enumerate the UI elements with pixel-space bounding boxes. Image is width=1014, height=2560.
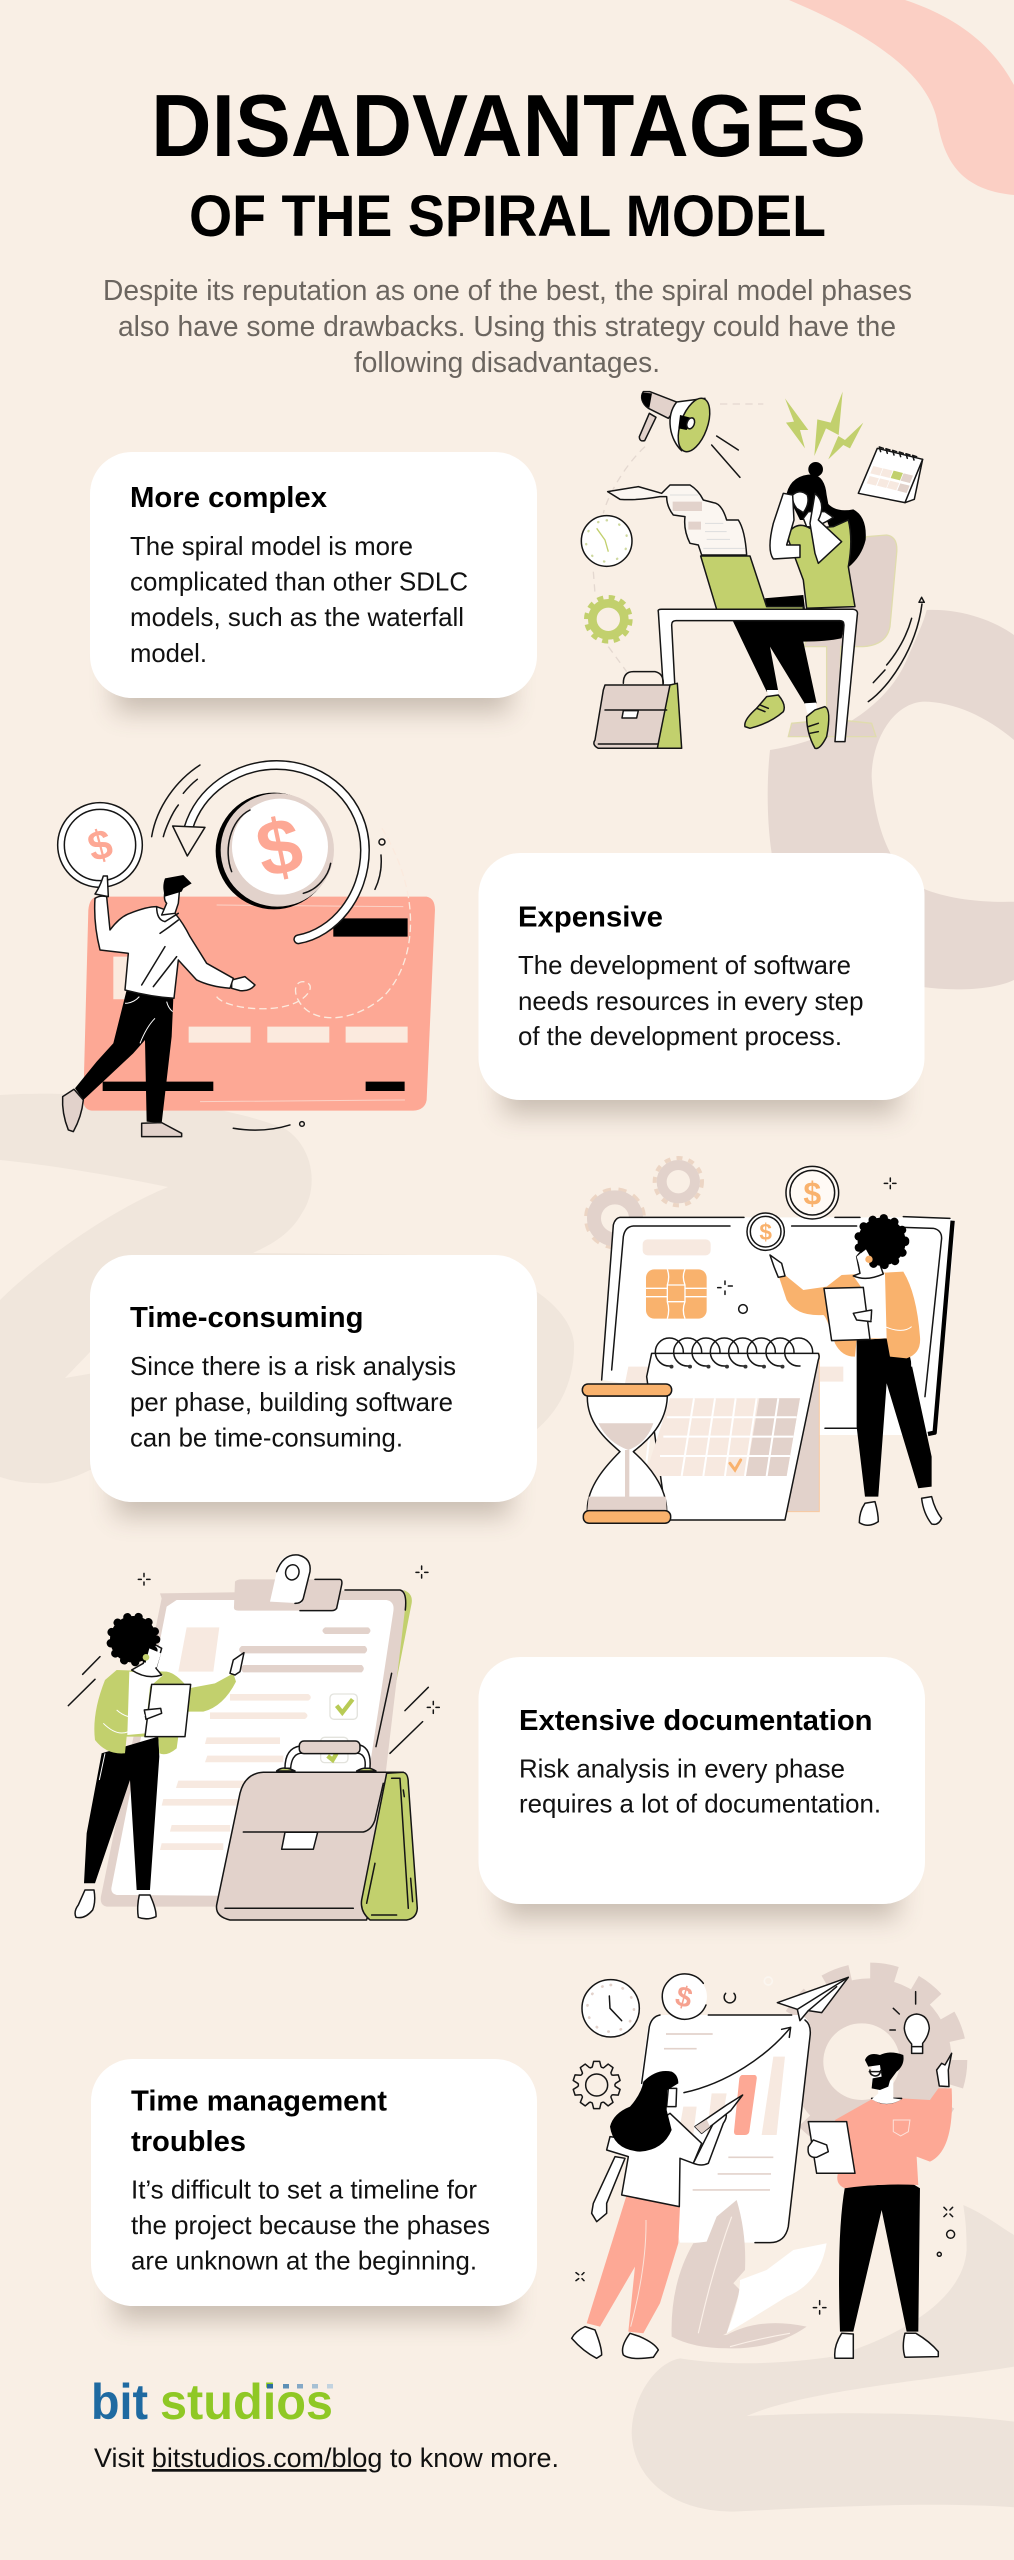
body text: The spiral model is more: [130, 531, 413, 561]
hourglass: [582, 1384, 672, 1523]
laptop: [701, 556, 803, 609]
intro text: also have some drawbacks. Using this strategy could have the: [118, 311, 896, 343]
body text: model.: [130, 638, 207, 668]
megaphone: [639, 392, 716, 456]
card: Time management troubles: [91, 2059, 537, 2320]
illustration: stressed woman at desk: [581, 392, 924, 748]
icon: calendar: [858, 447, 923, 503]
icon: gear outline: [573, 2061, 621, 2109]
body text: per phase, building software: [130, 1387, 453, 1417]
body text: models, such as the waterfall: [130, 602, 464, 632]
gears: [586, 1158, 702, 1247]
icon: dollar coin: $: [672, 1980, 696, 2015]
coins: [747, 1166, 839, 1250]
big coin: [216, 793, 334, 909]
sparkle and ring: [718, 1178, 896, 1313]
icon: wall clock: [581, 516, 632, 566]
man: [63, 875, 255, 1137]
body text: requires a lot of documentation.: [519, 1788, 881, 1818]
plant leaves: [672, 2200, 827, 2348]
body text: are unknown at the beginning.: [131, 2246, 477, 2276]
body text: [130, 531, 468, 668]
heading: Expensive: [518, 902, 663, 934]
calendar: [645, 1338, 819, 1520]
chip: [646, 1269, 707, 1319]
small coin: [58, 803, 142, 887]
sound lines: [712, 436, 740, 477]
heading: [131, 2086, 387, 2158]
heading: Time-consuming: [130, 1302, 364, 1334]
dashed orbit: [593, 404, 763, 672]
body text: needs resources in every step: [518, 986, 864, 1016]
man with tablet: [808, 2052, 952, 2358]
card: Time-consuming: [90, 1255, 537, 1516]
woman: [75, 1616, 244, 1919]
icon: paper plane: [777, 1977, 848, 2021]
intro text: Despite its reputation as one of the best, the spiral model phases: [103, 275, 912, 307]
body text: [519, 1754, 881, 1818]
woman: [770, 1218, 942, 1525]
small ornaments: [724, 1977, 772, 2003]
logo: bit studios: bit: [91, 2374, 148, 2430]
body text: The development of software: [518, 950, 851, 980]
credit card: [83, 825, 435, 1111]
body text: of the development process.: [518, 1021, 842, 1051]
logo: bit studios: studios: [160, 2374, 333, 2430]
briefcase: [594, 672, 682, 748]
chair: [788, 535, 897, 737]
icon: lightning bolts: [785, 392, 863, 459]
background blob: mauve right: [768, 610, 1014, 989]
heading: troubles: [131, 2126, 246, 2158]
body text: can be time-consuming.: [130, 1422, 403, 1452]
coins: $: [803, 1175, 821, 1211]
card: Extensive documentation: [478, 1657, 925, 1918]
clipboard: [101, 1555, 412, 1907]
heading: Time management: [131, 2086, 387, 2118]
woman: [733, 462, 866, 748]
big gear: [783, 1973, 957, 2147]
monitor: [602, 1217, 955, 1435]
icon: gear: [587, 598, 630, 641]
card: More complex: [90, 452, 537, 712]
heading: Extensive documentation: [519, 1705, 872, 1737]
big coin: $: [249, 799, 310, 895]
background blob: tan left: [0, 1094, 574, 1483]
body text: Risk analysis in every phase: [519, 1754, 845, 1784]
body text: [518, 950, 864, 1051]
motion accents: [152, 765, 385, 1130]
sparkles and speed lines: [68, 1566, 439, 1753]
briefcase: [216, 1741, 417, 1920]
motion lines with arrow: [868, 597, 924, 702]
circular arrow: [173, 765, 365, 939]
woman with pencil: [572, 2071, 743, 2359]
body text: It’s difficult to set a timeline for: [131, 2174, 477, 2204]
coins: $: [759, 1219, 772, 1245]
illustration: woman with monitor, calendar and hourglass: [582, 1158, 955, 1525]
illustration: woman with clipboard and briefcase: [68, 1555, 439, 1920]
subtitle: OF THE SPIRAL MODEL: [189, 184, 826, 249]
chart board: [640, 2015, 811, 2243]
sparkles and dots: [576, 2207, 955, 2314]
desk: [658, 609, 857, 742]
body text: the project because the phases: [131, 2210, 490, 2240]
illustration: man with credit card and coins: [58, 765, 435, 1137]
body text: [130, 1351, 456, 1452]
icon: dollar coin: [662, 1974, 707, 2019]
title: DISADVANTAGES: [151, 76, 866, 175]
footer link text: Visit bitstudios.com/blog to know more.: [94, 2443, 559, 2473]
background blob: tan bottom right: [632, 2205, 1014, 2512]
icon: light bulb: [890, 1992, 929, 2053]
intro text: [103, 275, 912, 379]
icon: clock: [582, 1980, 639, 2037]
intro text: following disadvantages.: [354, 347, 660, 379]
body text: Since there is a risk analysis: [130, 1351, 456, 1381]
background blob: pink top right: [789, 0, 1014, 195]
body text: [131, 2174, 490, 2276]
illustration: woman and man presenting chart: [572, 1973, 957, 2359]
small coin: $: [83, 819, 117, 871]
body text: complicated than other SDLC: [130, 566, 468, 596]
title: [151, 76, 866, 249]
paper stream: [608, 485, 747, 555]
heading: More complex: [130, 482, 327, 514]
card: Expensive: [478, 853, 924, 1114]
